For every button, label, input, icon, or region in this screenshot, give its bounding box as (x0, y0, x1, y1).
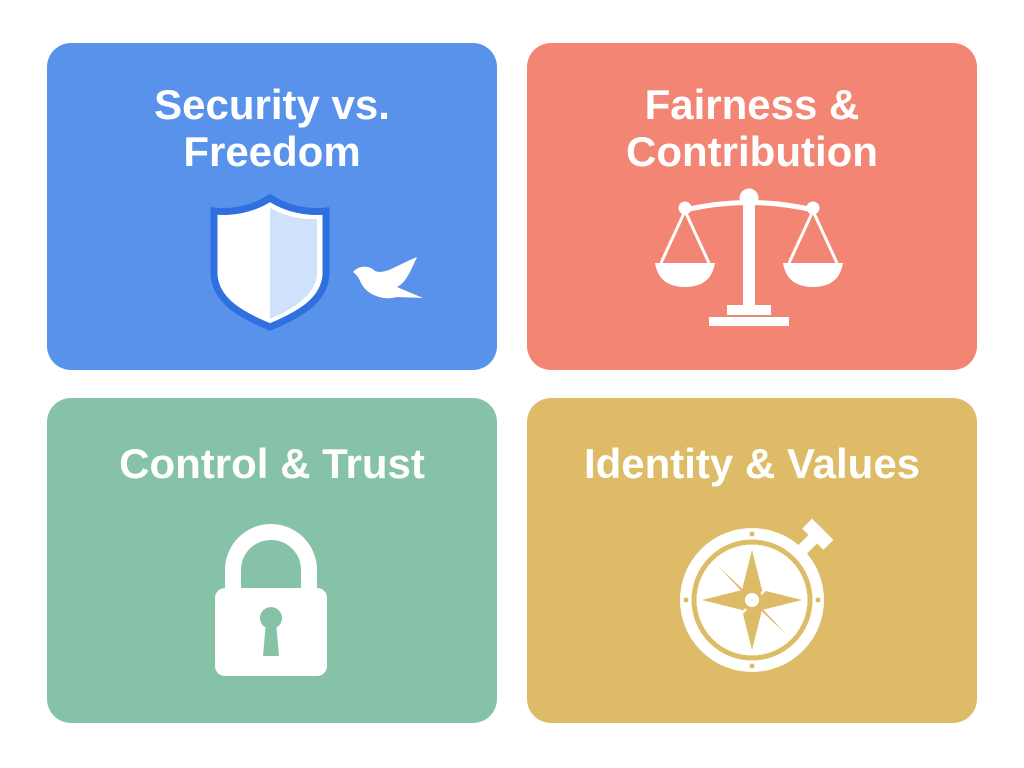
heading: security vs freedom: Security vs. (154, 81, 390, 128)
heading: fairness & contribution (626, 81, 878, 175)
panel: fairness & contribution (527, 43, 977, 370)
icon: shield and bird (210, 194, 423, 331)
icon: padlock (215, 524, 327, 676)
heading: fairness & contribution: Contribution (626, 128, 878, 175)
icon: compass (680, 518, 834, 672)
panel: security vs freedom (47, 43, 497, 370)
icon: scales (655, 188, 843, 326)
heading: security vs freedom: Freedom (183, 128, 361, 175)
heading: control & trust: Control & Trust (119, 440, 425, 487)
heading: security vs freedom (154, 81, 390, 175)
heading: fairness & contribution: Fairness & (645, 81, 859, 128)
panel: control & trust (47, 398, 497, 723)
panel: identity & values (527, 398, 977, 723)
heading: identity & values: Identity & Values (584, 440, 920, 487)
